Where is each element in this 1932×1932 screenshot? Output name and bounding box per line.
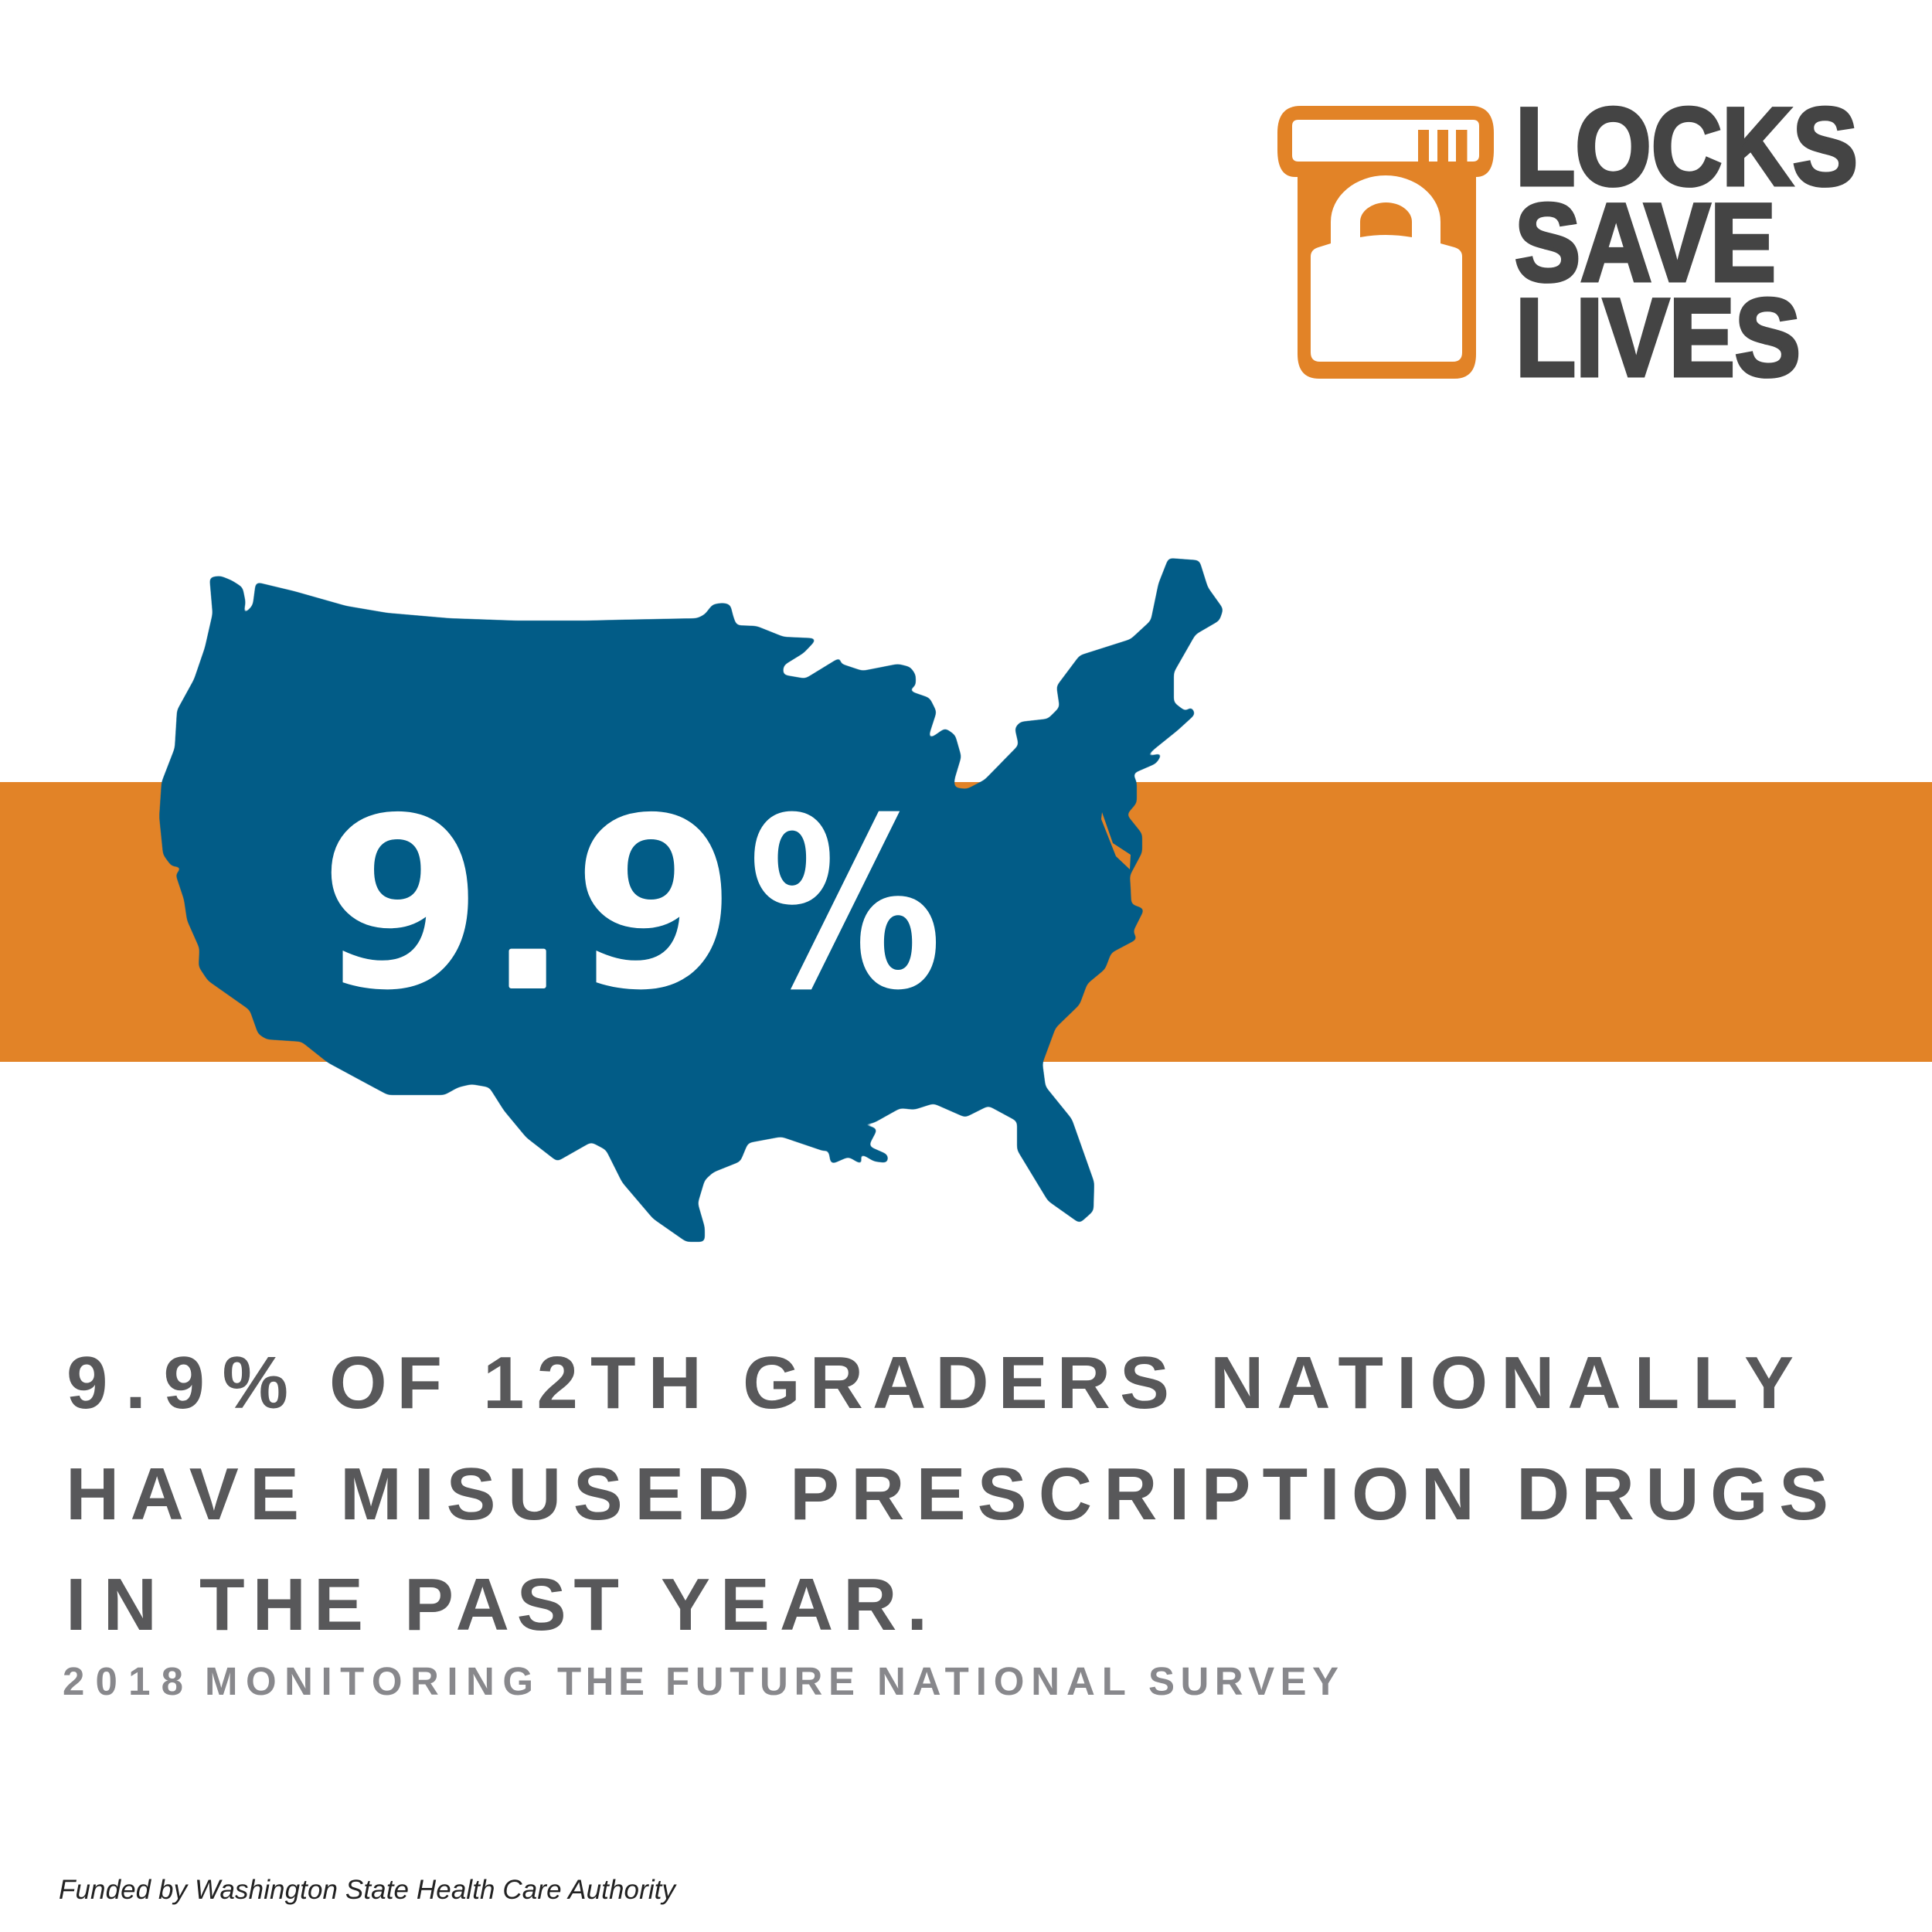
source line: MONITORING bbox=[205, 1659, 533, 1703]
main statement text: IN bbox=[66, 1563, 157, 1646]
source line: 2018 bbox=[63, 1659, 183, 1703]
main statement text: GRADERS bbox=[743, 1342, 1169, 1424]
main statement text: PAST bbox=[404, 1563, 619, 1646]
logo: locks save lives bbox=[1277, 86, 1858, 400]
logo wordmark: LIVES bbox=[1515, 277, 1801, 400]
main statement text: MISUSED bbox=[340, 1453, 750, 1536]
big statistic: 9.9% bbox=[319, 767, 942, 1042]
source line: SURVEY bbox=[1148, 1659, 1338, 1703]
source line: NATIONAL bbox=[877, 1659, 1125, 1703]
big statistic: 9.9%: 9 bbox=[573, 767, 736, 1042]
source line: THE bbox=[557, 1659, 645, 1703]
main statement text: THE bbox=[199, 1563, 363, 1646]
source line: FUTURE bbox=[665, 1659, 855, 1703]
logo wordmark bbox=[1515, 86, 1858, 400]
main statement text: YEAR. bbox=[661, 1563, 927, 1646]
logo wordmark: SAVE bbox=[1515, 182, 1776, 304]
big statistic: 9.9%: . bbox=[492, 814, 563, 1030]
chesapeake bay sliver bbox=[1101, 812, 1131, 869]
main statement text: HAVE bbox=[66, 1453, 299, 1536]
orange band bbox=[0, 782, 1932, 1062]
map of the United States bbox=[159, 558, 1223, 1242]
funding credit: Funded by Washington State Health Care Authority bbox=[59, 1875, 677, 1905]
main statement text: PRESCRIPTION bbox=[790, 1453, 1475, 1536]
main statement text: NATIONALLY bbox=[1210, 1342, 1794, 1424]
main statement text: 12TH bbox=[483, 1342, 702, 1424]
main statement text: 9.9% bbox=[66, 1342, 288, 1424]
main statement text bbox=[66, 1342, 1828, 1646]
logo wordmark: LOCKS bbox=[1515, 86, 1858, 209]
big statistic: 9.9%: % bbox=[748, 767, 942, 1042]
main statement text: DRUGS bbox=[1516, 1453, 1828, 1536]
big statistic: 9.9%: 9 bbox=[319, 767, 483, 1042]
icon: pill bottle with padlock bbox=[1277, 106, 1494, 379]
main statement text: OF bbox=[329, 1342, 442, 1424]
